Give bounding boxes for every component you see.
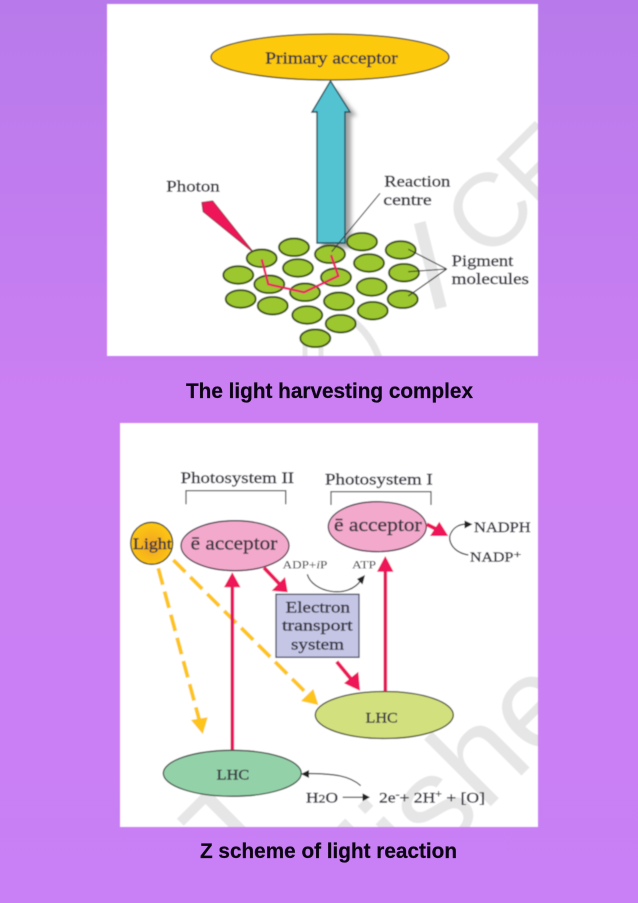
arrow: ADP to ATP curve — [307, 574, 365, 592]
heading: Z scheme: Z scheme of light reaction — [200, 839, 457, 863]
box: electron transport system — [276, 594, 359, 657]
label: reaction centre: centre — [383, 192, 432, 209]
label: ADP+iP: ADP+iP — [283, 557, 328, 571]
ellipse: LHC I — [315, 692, 453, 738]
box: electron transport system: Electron — [286, 599, 350, 616]
arrow: acceptor to NADPH — [427, 522, 448, 536]
equation: water splitting: H2O — [306, 791, 338, 807]
panel: Z scheme — [119, 422, 539, 828]
label: photosystem I: Photosystem I — [325, 471, 433, 488]
arrow: electron transport to LHC I — [337, 662, 360, 691]
ellipse: photosystem I acceptor: ē acceptor — [334, 515, 422, 536]
equation: water splitting: + — [435, 790, 442, 801]
icon: photon wedge — [202, 201, 255, 254]
label: photosystem I — [325, 471, 433, 505]
equation: water splitting: - — [396, 790, 400, 801]
box: electron transport system: system — [291, 636, 344, 653]
arrow: up to primary acceptor — [312, 81, 357, 248]
panel: Z scheme: T — [155, 744, 314, 903]
label: NADP+: NADP⁺ — [470, 551, 522, 566]
equation: water splitting: 2e — [379, 791, 393, 807]
arrow: dashed light to LHC II — [158, 568, 208, 734]
icon: light — [131, 522, 173, 564]
arrow: LHC I to acceptor — [377, 556, 394, 693]
label: pigment molecules — [452, 253, 529, 288]
ellipse: photosystem I acceptor — [328, 502, 426, 552]
label: pigment molecules: Pigment — [452, 253, 514, 270]
arrow: NADP to NADPH curve — [450, 520, 472, 555]
icon: light: Light — [133, 536, 172, 553]
label: pigment molecules: molecules — [452, 271, 529, 288]
leader lines: pigment molecules — [408, 249, 447, 296]
box: electron transport system: transport — [282, 618, 354, 635]
heading: light harvesting complex: The light harvesting complex — [186, 379, 473, 403]
panel: light harvesting complex: C — [422, 144, 557, 279]
label: NADPH: NADPH — [474, 520, 531, 536]
ellipse: photosystem II acceptor — [181, 521, 289, 571]
pigment molecules — [223, 233, 419, 347]
ellipse: LHC II — [163, 750, 301, 796]
primary acceptor ellipse: Primary acceptor — [265, 48, 398, 68]
primary acceptor ellipse — [211, 34, 449, 80]
label: photosystem II: Photosystem II — [181, 470, 294, 487]
label: photon: Photon — [166, 179, 220, 196]
equation: water splitting: + 2H — [400, 791, 435, 807]
arrow: acceptor to electron transport — [264, 568, 288, 592]
ellipse: LHC I: LHC — [366, 711, 398, 727]
equation: water splitting — [306, 790, 485, 807]
panel: light harvesting complex — [106, 3, 539, 357]
label: ATP: ATP — [352, 557, 376, 571]
leader line: reaction centre — [332, 193, 380, 252]
ellipse: LHC II: LHC — [217, 767, 249, 783]
label: photosystem II — [181, 470, 294, 504]
equation: water splitting: + [O] — [442, 791, 485, 807]
panel: light harvesting complex: I — [396, 192, 465, 339]
arrow: dashed light to LHC I — [173, 560, 318, 705]
electron path — [262, 255, 338, 292]
arrow: LHC II to acceptor — [224, 572, 240, 750]
panel: light harvesting complex: E — [475, 101, 606, 232]
arrow: water electrons to LHC II — [301, 770, 361, 786]
ellipse: photosystem II acceptor: ē acceptor — [191, 533, 278, 554]
label: reaction centre: Reaction — [384, 174, 451, 191]
label: reaction centre — [383, 174, 451, 209]
